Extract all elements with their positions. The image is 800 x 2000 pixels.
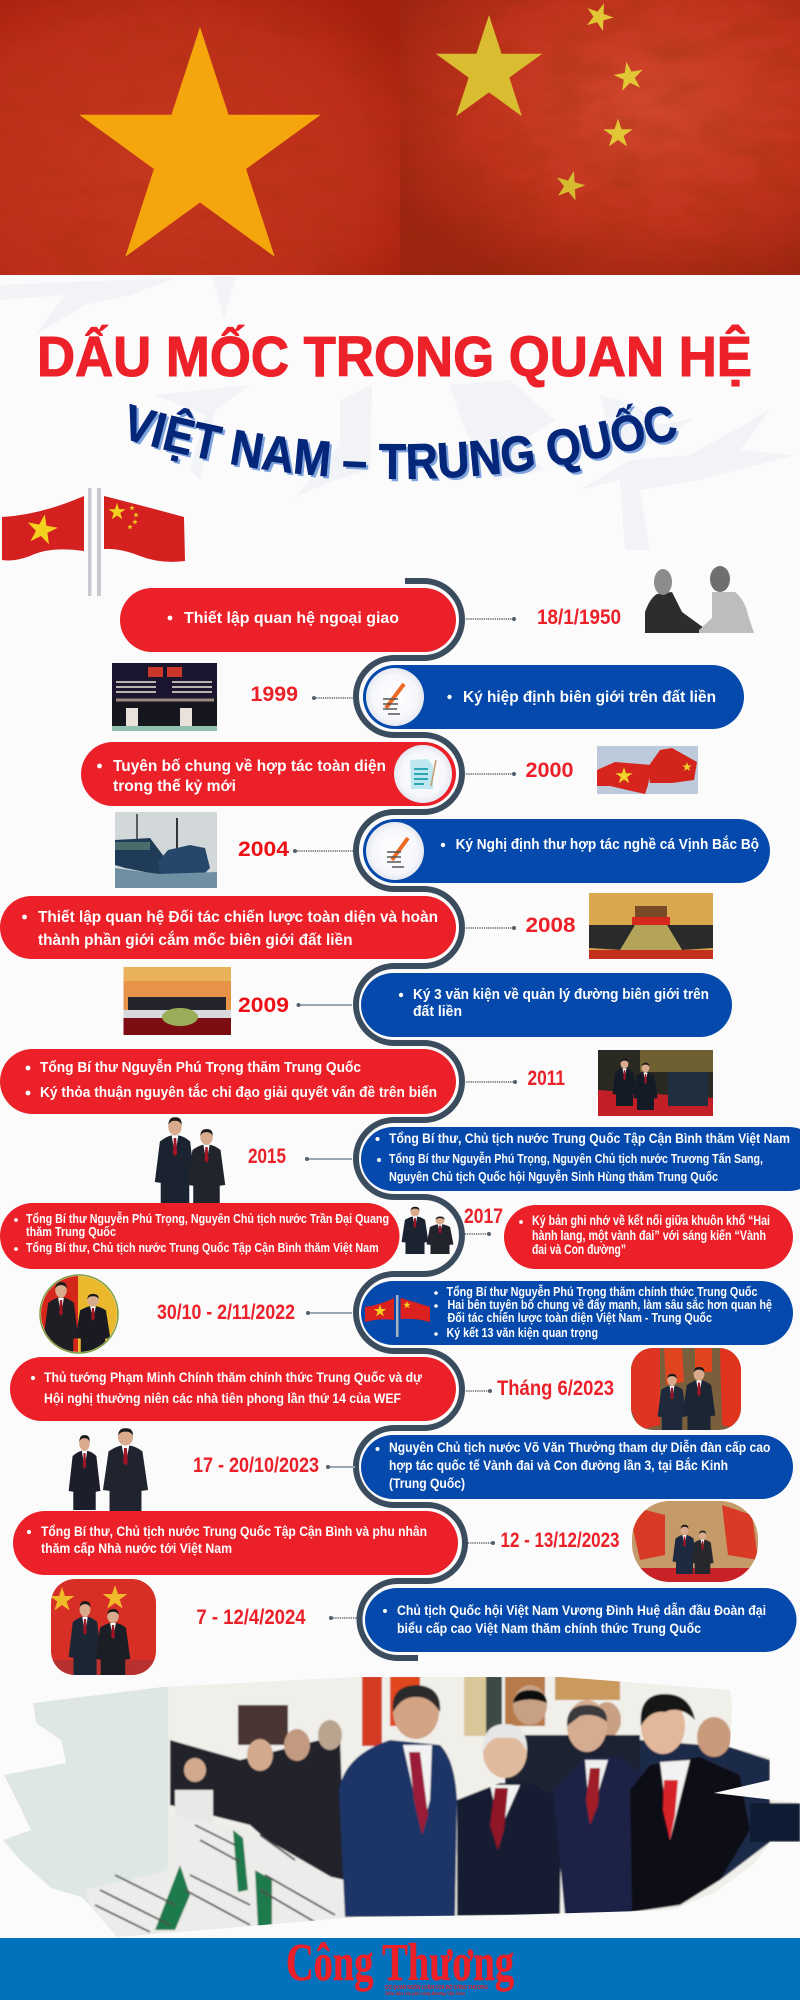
photo: two leaders shaking hands: [69, 1428, 148, 1511]
photo: round portrait: [40, 1275, 118, 1357]
date: 18/1/1950: [537, 606, 621, 629]
connector: [293, 849, 354, 853]
pill: biểu cấp cao Việt Nam thăm chính thức Trung Quốc: [397, 1621, 701, 1637]
photo: honor guard: [598, 1050, 713, 1116]
pill: [0, 896, 456, 959]
milestone 7 - 12/4/2024: [50, 1579, 796, 1676]
pill: [0, 1049, 456, 1114]
pill: [120, 588, 456, 652]
pill: Hội nghị thường niên các nhà tiên phong lần thứ 14 của WEF: [44, 1391, 401, 1407]
photo: signing ceremony: [124, 967, 231, 1035]
logo: Công Thương: Công Thương: [286, 1934, 514, 1992]
milestone 18/1/1950: [120, 566, 754, 652]
milestone 2017: [0, 1203, 793, 1269]
milestone 2009: [124, 967, 732, 1037]
connector: [306, 1311, 352, 1315]
logo: Công Thương: [286, 1934, 514, 1997]
connector: [464, 926, 516, 930]
date: 2004: [238, 838, 289, 861]
connector: [312, 696, 354, 700]
photo: two flags: [597, 746, 698, 794]
left pill: [0, 1203, 400, 1269]
pill: Ký kết 13 văn kiện quan trọng: [446, 1326, 598, 1340]
logo: Công Thương: CƠ QUAN NGÔN LUẬN CỦA BỘ CÔNG THƯƠNG: [385, 1983, 488, 1991]
photo: leaders before flags: [50, 1579, 156, 1676]
milestone 2000: [81, 742, 698, 806]
pill: thành phần giới cắm mốc biên giới đất liền: [38, 930, 352, 949]
date: 2017: [464, 1205, 503, 1228]
pill: hợp tác quốc tế Vành đai và Con đường lần 3, tại Bắc Kinh: [389, 1456, 728, 1474]
milestone 12 - 13/12/2023: [13, 1501, 758, 1582]
milestone 2011: [0, 1049, 713, 1116]
pill: Thiết lập quan hệ Đối tác chiến lược toàn diện và hoàn: [38, 909, 438, 926]
milestone Tháng 6/2023: [10, 1348, 741, 1432]
serpentine timeline line: [356, 581, 465, 1658]
pill: [363, 819, 770, 883]
background doves pattern: [0, 277, 795, 550]
milestone 2004: [115, 812, 770, 888]
date: 1999: [250, 683, 298, 706]
date: 17 - 20/10/2023: [193, 1454, 319, 1477]
right pill: đai và Con đường”: [532, 1242, 626, 1257]
left pill: Tổng Bí thư Nguyễn Phú Trọng, Nguyên Chủ tịch nước Trần Đại Quang: [26, 1211, 389, 1226]
photo: wood hall with flags: [632, 1501, 758, 1582]
pill: [81, 742, 456, 806]
pill: đất liền: [413, 1003, 462, 1020]
date: 2000: [526, 759, 574, 782]
connector: [468, 1541, 495, 1545]
photo: rounded portrait: [631, 1348, 741, 1432]
icon: pencil: [366, 668, 424, 726]
pill: [361, 973, 732, 1037]
icon: two flags on pole: [365, 1295, 430, 1337]
connector: [464, 1080, 517, 1084]
pill: [361, 1281, 793, 1345]
pill: Tổng Bí thư, Chủ tịch nước Trung Quốc Tập Cận Bình và phu nhân: [41, 1524, 427, 1540]
icon: document: [394, 745, 452, 803]
connector: [464, 1389, 492, 1393]
pill: [10, 1357, 456, 1421]
connector: [464, 772, 516, 776]
pill: thăm cấp Nhà nước tới Việt Nam: [41, 1541, 232, 1557]
pill: Tuyên bố chung về hợp tác toàn diện: [113, 758, 386, 775]
milestone 2008: [0, 893, 713, 959]
subtitle on a curve: VIỆT NAM – TRUNG QUỐC: [130, 403, 676, 480]
pill: Ký 3 văn kiện về quản lý đường biên giới trên: [413, 986, 709, 1003]
footer band with logo: [0, 1934, 800, 2000]
pill: Đối tác chiến lược toàn diện Việt Nam - Trung Quốc: [448, 1311, 712, 1325]
header image: Chinese flag: [400, 0, 800, 275]
milestone 2015: [155, 1117, 800, 1204]
date: 2008: [526, 914, 576, 937]
connector: [296, 1003, 352, 1007]
icon: pencil: [366, 822, 424, 880]
pill: [13, 1511, 458, 1575]
connector: [305, 1157, 352, 1161]
pill: Tổng Bí thư Nguyễn Phú Trọng thăm chính thức Trung Quốc: [446, 1284, 758, 1299]
milestone 1999: [112, 663, 744, 731]
pill: trong thế kỷ mới: [113, 778, 236, 795]
date: 2015: [248, 1145, 286, 1168]
pill: Tổng Bí thư Nguyễn Phú Trọng thăm Trung Quốc: [40, 1059, 361, 1076]
pill: Nguyên Chủ tịch Quốc hội Nguyễn Sinh Hùng thăm Trung Quốc: [389, 1169, 718, 1184]
milestone 17 - 20/10/2023: [69, 1428, 793, 1511]
photo: signing group: [112, 663, 217, 731]
pill: Ký Nghị định thư hợp tác nghề cá Vịnh Bắc Bộ: [456, 835, 759, 853]
milestone 30/10 - 2/11/2022: [40, 1275, 793, 1357]
photo: historic handshake: [645, 566, 754, 633]
date: 2009: [238, 994, 289, 1017]
date: 12 - 13/12/2023: [500, 1529, 620, 1552]
pill: Ký thỏa thuận nguyên tắc chỉ đạo giải quyết vấn đề trên biển: [40, 1083, 437, 1101]
pill: Thủ tướng Phạm Minh Chính thăm chính thức Trung Quốc và dự: [44, 1370, 423, 1386]
connector: [329, 1616, 357, 1620]
pill: (Trung Quốc): [389, 1476, 465, 1492]
date: Tháng 6/2023: [497, 1377, 614, 1400]
logo: Công Thương: Diễn đàn của giới công thương Việt Nam: [384, 1990, 466, 1997]
subtitle on a curve: VIỆT NAM – TRUNG QUỐC: [134, 406, 679, 482]
date: 2011: [528, 1067, 565, 1090]
date: 30/10 - 2/11/2022: [157, 1301, 295, 1324]
pill: Thiết lập quan hệ ngoại giao: [184, 610, 399, 627]
pill: [363, 665, 744, 729]
pill: [365, 1588, 796, 1652]
left pill: Tổng Bí thư, Chủ tịch nước Trung Quốc Tập Cận Bình thăm Việt Nam: [26, 1241, 379, 1255]
left pill: thăm Trung Quốc: [26, 1225, 116, 1239]
header image: Vietnamese flag: [0, 0, 400, 275]
photo: banquet hall: [589, 893, 713, 959]
connector: [464, 617, 516, 621]
bottom photo: leaders viewing books: [0, 1670, 800, 1940]
date: 7 - 12/4/2024: [196, 1606, 306, 1629]
photo: fishing boats: [115, 812, 217, 888]
photo: two leaders: [155, 1117, 225, 1204]
connector: [326, 1465, 355, 1469]
photo: two leaders: [402, 1207, 453, 1254]
title: DẤU MỐC TRONG QUAN HỆ: [37, 324, 752, 389]
pill: [361, 1435, 793, 1499]
connector: [465, 1232, 491, 1236]
pill: [361, 1127, 800, 1191]
icon: two flags on poles: [2, 488, 185, 596]
pill: Ký hiệp định biên giới trên đất liền: [463, 689, 716, 706]
right pill: [504, 1205, 793, 1269]
